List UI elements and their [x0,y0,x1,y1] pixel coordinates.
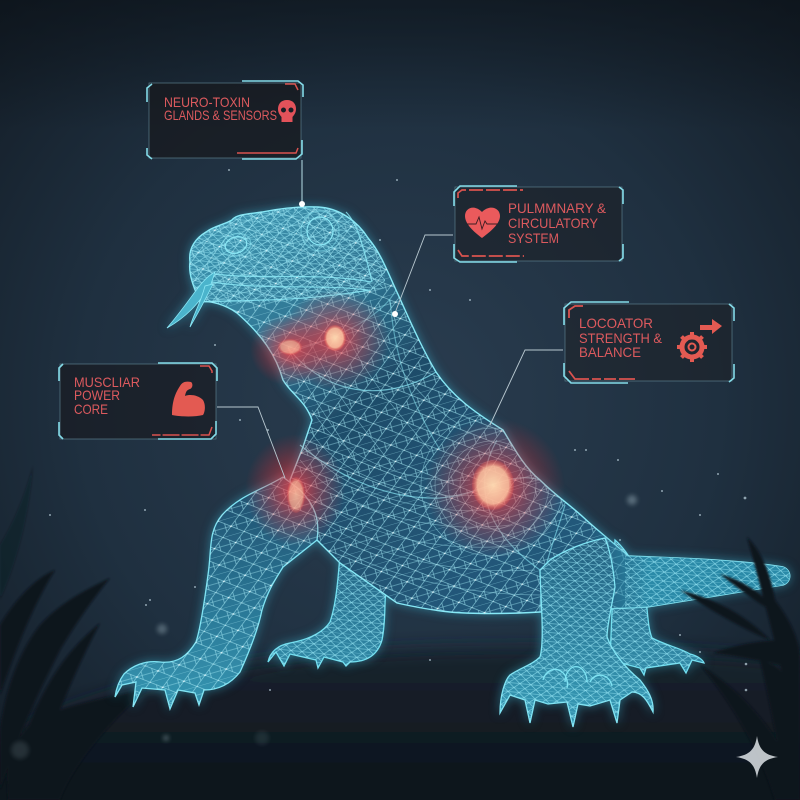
leader line: muscular [217,407,285,478]
red glow: neuro-toxin throat [250,290,390,390]
torso, neck, head and tail [180,200,800,620]
panel: neuro-toxin glands and sensors: NEURO-TOXIN [164,94,250,110]
panel: pulmonary and circulatory system [454,186,623,262]
panel: locomotor strength and balance [564,302,734,383]
icon: flexed bicep [172,382,205,416]
panel: pulmonary and circulatory system: PULMMNARY & [508,200,607,216]
icon: gear with arrow [677,319,722,362]
panel: muscular power core: CORE [74,401,108,417]
leader line: neuro-toxin [299,160,305,207]
star dust particles [11,169,747,759]
panel: neuro-toxin glands and sensors: GLANDS & SENSORS [164,107,277,123]
panel: locomotor strength and balance: STRENGTH & [579,330,663,346]
far hind foot [610,540,704,675]
panel: pulmonary and circulatory system: SYSTEM [508,230,559,246]
head details: eyes, mouth and neck folds [200,211,565,612]
watermark: four-point sparkle [736,736,778,778]
near front leg [115,477,318,709]
panel: muscular power core [59,363,217,439]
leader line: locomotor [490,350,563,425]
wireframe komodo dragon [115,200,800,727]
panel: neuro-toxin glands and sensors [147,81,303,159]
leader line: pulmonary [392,235,453,317]
red glow: shoulder muscle [245,434,345,546]
panel: muscular power core: POWER [74,387,120,403]
red glow: hip locomotor [425,418,565,558]
forked tongue [167,272,215,328]
foreground foliage: right fern over tail [680,537,800,800]
background foliage: left fern [0,465,147,800]
panel: locomotor strength and balance: BALANCE [579,344,641,360]
panel: locomotor strength and balance: LOCOATOR [579,315,653,331]
icon: skull [278,100,296,122]
panel: muscular power core: MUSCLIAR [74,374,140,390]
icon: heart with pulse [465,208,500,238]
near hind leg [500,538,653,727]
panel: pulmonary and circulatory system: CIRCULATORY [508,215,599,231]
far front foot [268,555,386,668]
